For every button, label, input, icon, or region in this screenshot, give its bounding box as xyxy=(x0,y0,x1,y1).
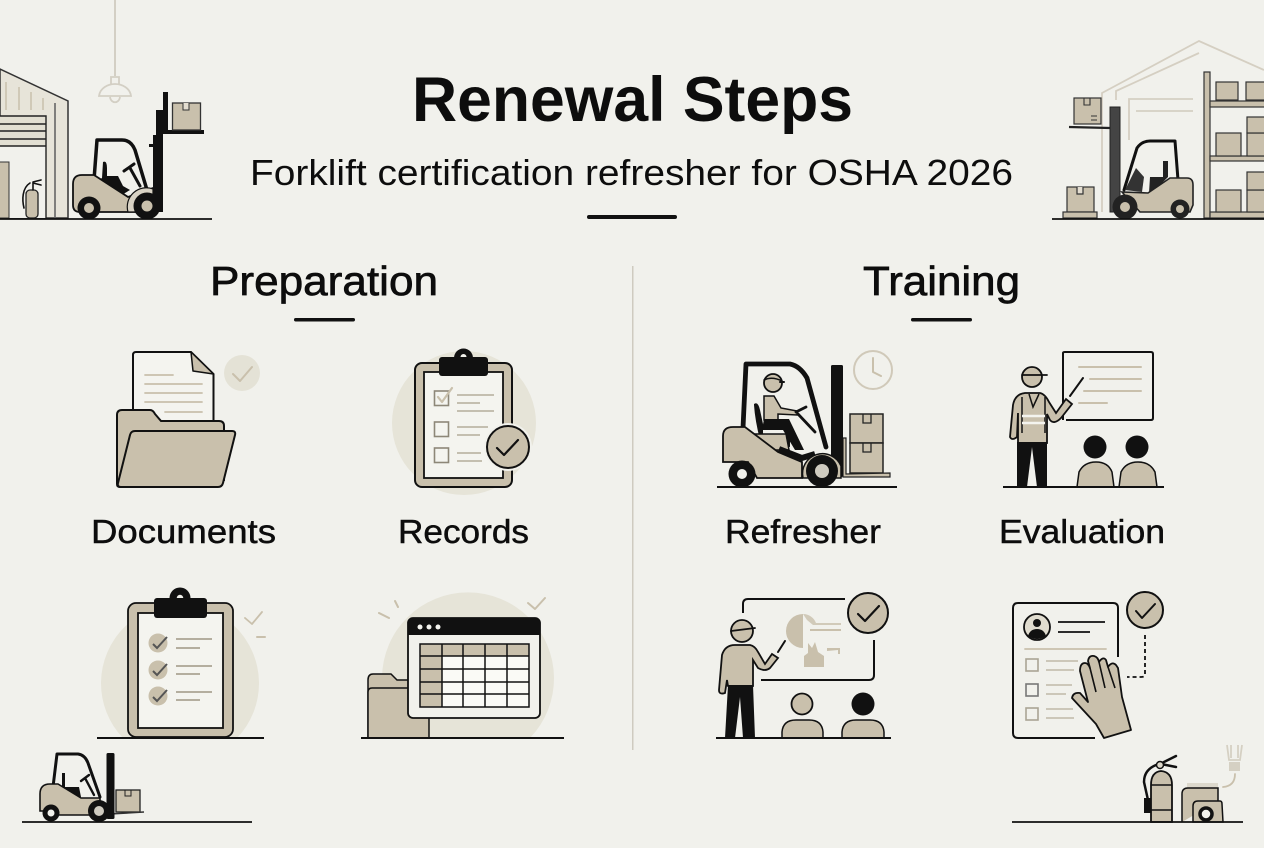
sub: hand xyxy=(1072,656,1131,738)
icon: forklift xyxy=(73,92,204,220)
sub: trainer xyxy=(1010,367,1072,487)
divider between sections xyxy=(632,266,634,750)
icon: fire extinguisher xyxy=(23,180,41,218)
icon: small forklift bottom left xyxy=(22,753,252,822)
label: Refresher: Refresher xyxy=(725,513,881,550)
icon: documents folder xyxy=(117,352,260,487)
heading: Training: Training xyxy=(863,258,1020,304)
illustration: warehouse with forklift top left xyxy=(0,0,212,220)
sub: audience xyxy=(782,692,884,738)
icon: hanging lamp xyxy=(99,0,131,102)
sub: driver xyxy=(750,374,815,450)
icon: presenter with chart board xyxy=(716,593,891,738)
icon: signed form with hand xyxy=(1013,592,1163,738)
heading: Preparation: Preparation xyxy=(210,258,438,304)
title: Renewal Steps xyxy=(412,65,853,135)
icon: extinguisher and machine bottom right xyxy=(1012,745,1243,822)
icon: records clipboard xyxy=(392,348,536,495)
sub: chart on board xyxy=(786,614,841,667)
icon: checklist clipboard xyxy=(97,588,265,738)
sub: audience xyxy=(1077,436,1157,487)
icon: forklift xyxy=(1069,98,1193,220)
subtitle: Forklift certification refresher for OSHA 2026 xyxy=(250,152,1013,193)
icon: spreadsheet with folder xyxy=(361,592,564,738)
icon: shelving rack xyxy=(1204,72,1264,218)
icon: refresher forklift with driver xyxy=(717,351,897,488)
sub: presenter xyxy=(719,620,778,738)
icon: stacked box on pallet xyxy=(1063,187,1097,218)
label: Records: Records xyxy=(398,513,529,550)
sub: boxes on forks xyxy=(843,414,890,477)
icon: evaluation trainer at board xyxy=(1003,352,1164,487)
label: Evaluation: Evaluation xyxy=(999,513,1165,550)
label: Documents: Documents xyxy=(91,513,276,550)
illustration: warehouse with forklift top right xyxy=(1052,41,1264,220)
